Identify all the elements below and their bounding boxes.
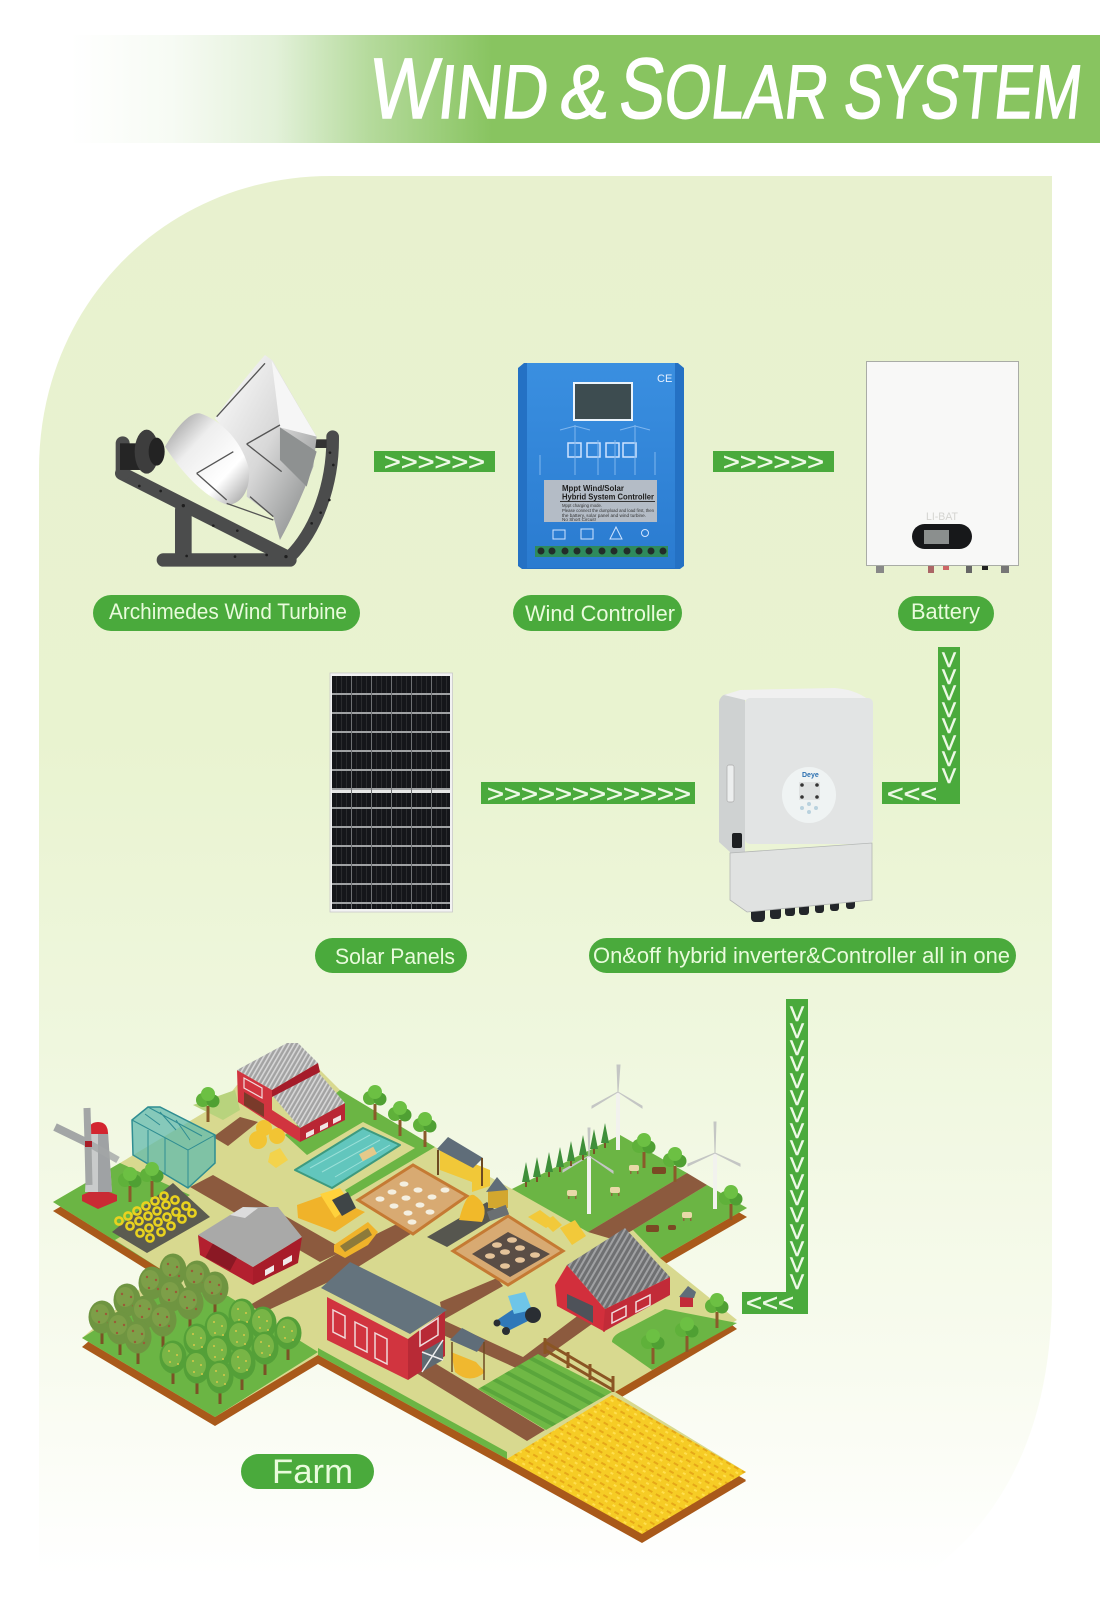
arrow: inverter to farm: V <box>790 1187 804 1210</box>
small doghouse <box>679 1286 696 1307</box>
arrow: battery to inverter: V <box>942 732 956 755</box>
arrow: battery to inverter: V <box>942 682 956 705</box>
arrow: battery to inverter <box>882 647 960 808</box>
arrow: inverter to farm: V <box>790 1137 804 1160</box>
label: hybrid inverter <box>589 938 1016 973</box>
turbines on farm <box>563 1065 740 1214</box>
battery product image <box>866 362 1018 573</box>
inverter display: Deye <box>802 772 819 779</box>
turbine frame bolts <box>138 451 335 558</box>
battery case <box>866 362 1018 566</box>
inverter side <box>719 694 745 905</box>
controller buttons <box>540 425 655 475</box>
pig pen <box>453 1216 563 1285</box>
arrow: inverter to farm: V <box>790 1120 804 1143</box>
battery display <box>912 524 972 549</box>
label: hybrid inverter: On&off hybrid inverter&Controller all in one <box>593 943 1010 968</box>
arrow: inverter to farm: V <box>790 1171 804 1194</box>
big grey-roof barn <box>321 1262 447 1380</box>
title text: SOLAR <box>615 41 834 137</box>
controller CE mark: CE <box>657 373 672 385</box>
controller label plate: the battery, solar panel and wind turbine. <box>562 513 646 518</box>
arrow: inverter to farm: V <box>790 1053 804 1076</box>
arrow: inverter to farm: V <box>790 1070 804 1093</box>
controller label plate: Mppt charging mode. <box>562 503 602 508</box>
wheat field <box>507 1395 746 1542</box>
label: Wind Controller <box>513 595 682 631</box>
sunflower patch <box>112 1183 210 1253</box>
crop rows <box>478 1354 612 1430</box>
farm ground <box>53 1050 747 1534</box>
small barn <box>198 1207 302 1285</box>
arrow: inverter to farm: V <box>790 1003 804 1026</box>
controller label plate: Please connect the dumpload and load first, then <box>562 508 654 513</box>
inverter display <box>782 767 836 823</box>
arrow: inverter to farm <box>742 999 808 1317</box>
label: Farm <box>241 1453 374 1491</box>
turbine blades <box>215 355 317 540</box>
blue tractor <box>494 1292 541 1335</box>
arrow: controller to battery <box>713 449 834 476</box>
hay stacks by pig pen <box>528 1210 586 1245</box>
turbine frame <box>122 437 333 560</box>
arrow: inverter to farm: V <box>790 1238 804 1261</box>
battery brand: LI-BAT <box>926 511 958 523</box>
turbine generator <box>120 430 327 474</box>
hay bales near barn 1 <box>249 1120 288 1168</box>
controller body <box>518 363 684 569</box>
wooden fence <box>545 1338 613 1392</box>
farm soil edge <box>53 1059 747 1543</box>
title banner <box>70 35 1100 143</box>
controller label plate: Hybrid System Controller <box>562 492 655 502</box>
arrow: turbine to controller: >>>>>> <box>384 449 485 476</box>
sheep pen <box>358 1165 467 1234</box>
arrow: inverter to farm: V <box>790 1087 804 1110</box>
barn 1 door <box>244 1092 264 1117</box>
controller screen <box>573 382 633 421</box>
arrow: battery to inverter: V <box>942 649 956 672</box>
hay under small shelter <box>450 1328 485 1380</box>
pond <box>295 1128 400 1188</box>
inverter handle <box>727 765 734 802</box>
barn 1 side wall <box>300 1103 345 1142</box>
arrow: inverter to farm: <<< <box>746 1290 794 1317</box>
title text <box>366 41 1086 137</box>
label: Archimedes Wind Turbine <box>93 595 360 631</box>
orchard <box>88 1254 302 1404</box>
greenhouse <box>132 1107 215 1188</box>
label: Wind Controller: Wind Controller <box>525 601 675 626</box>
controller label plate: Mppt Wind/Solar <box>562 483 625 493</box>
barn 1 roofs <box>237 1043 318 1090</box>
title text: WIND <box>366 41 554 137</box>
arrow: battery to inverter: V <box>942 666 956 689</box>
farm green lawns <box>53 1090 747 1459</box>
chicken yard <box>427 1202 500 1247</box>
wind controller product image <box>518 363 684 569</box>
arrow: inverter to farm: V <box>790 1221 804 1244</box>
arrow: battery to inverter: V <box>942 699 956 722</box>
harvester <box>297 1188 378 1258</box>
inverter connectors <box>751 897 855 922</box>
arrow: battery to inverter: V <box>942 765 956 788</box>
hay mound and silo <box>459 1177 509 1222</box>
title text: & <box>556 50 613 135</box>
arrow: inverter to farm: V <box>790 1271 804 1294</box>
inverter body <box>745 698 873 844</box>
barn 1 front wall <box>237 1070 300 1142</box>
arrow: inverter to farm: V <box>790 1104 804 1127</box>
arrow: inverter to farm: V <box>790 1020 804 1043</box>
solar panel product image <box>330 673 452 912</box>
hybrid inverter product image <box>719 688 873 922</box>
farm roads <box>190 1117 707 1441</box>
pine row <box>522 1123 609 1187</box>
arrow: inverter to farm: V <box>790 1154 804 1177</box>
wind turbine product image <box>120 355 335 560</box>
inverter switch <box>732 833 742 848</box>
arrow: inverter to farm: V <box>790 1254 804 1277</box>
label: Battery: Battery <box>911 599 980 624</box>
solar panel centre joint <box>332 790 450 793</box>
hay shelter <box>437 1137 490 1192</box>
controller label plate: No Short Circuit! <box>562 517 596 522</box>
red barn by tractor <box>555 1228 670 1332</box>
inverter top <box>724 688 873 704</box>
arrow: battery to inverter: V <box>942 748 956 771</box>
inverter lower box <box>730 843 872 912</box>
label: Farm: Farm <box>272 1453 353 1491</box>
arrow: solar panels to inverter: >>>>>>>>>>>> <box>487 781 691 808</box>
label: Solar Panels: Solar Panels <box>335 944 455 969</box>
arrow: controller to battery: >>>>>> <box>723 449 824 476</box>
arrow: battery to inverter: <<< <box>887 781 937 808</box>
controller terminal icons <box>553 527 648 539</box>
barn 1 <box>237 1043 345 1142</box>
arrow: battery to inverter: V <box>942 715 956 738</box>
controller label plate <box>544 480 657 522</box>
arrow: turbine to controller <box>374 449 495 476</box>
label: Battery <box>898 596 994 631</box>
label: Solar Panels <box>315 938 467 973</box>
battery connectors <box>876 564 1009 573</box>
windmill <box>55 1108 118 1209</box>
controller terminals <box>535 546 668 557</box>
pasture animals <box>567 1165 692 1232</box>
farm trees <box>118 1085 742 1364</box>
label: Archimedes Wind Turbine: Archimedes Wind Turbine <box>109 599 347 624</box>
arrow: inverter to farm: V <box>790 1204 804 1227</box>
arrow: inverter to farm: V <box>790 1037 804 1060</box>
farm illustration <box>53 1043 747 1543</box>
